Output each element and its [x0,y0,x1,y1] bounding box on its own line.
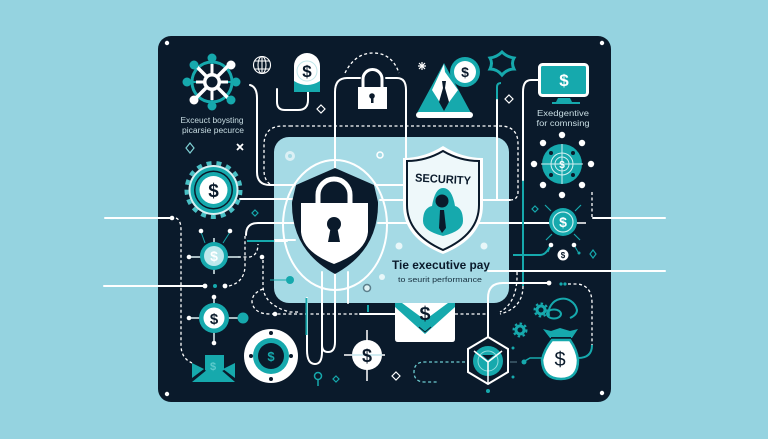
icon: coin right: $ [559,214,567,230]
circuit lines [104,53,665,382]
icon: triangle with tie [416,63,473,118]
headline text: to seurit performance [398,275,482,284]
caption: top left: Exceuct boysting [180,116,244,125]
icon: teal envelope [192,355,235,382]
caption: top right: for comnsing [536,119,590,128]
icon: money bag [510,328,578,379]
padlock [301,179,368,264]
icon: ship wheel [182,54,240,110]
icon: dollar tag [294,53,320,92]
icon: coin right [545,205,586,240]
light central panel [274,137,509,303]
icon: coin near triangle: $ [461,64,469,80]
dark circuit panel [158,36,611,402]
icon: monitor [540,64,588,104]
icon: globe [254,56,270,74]
icon: teal envelope: $ [210,361,216,373]
icon: padlock top [358,70,387,109]
icon: money bag: $ [554,349,566,371]
headline text: Tie executive pay [392,260,491,272]
icon: crosshair coin: $ [210,248,218,264]
caption: top left [180,116,245,135]
icon: coin near triangle [450,57,480,87]
security shield [403,146,483,254]
icon: monitor: $ [559,71,569,90]
icon: radial dollar hub: $ [559,160,565,171]
icon: teal hexagon [490,52,514,75]
caption: top left: picarsie pecurce [182,126,245,135]
icon: crosshair coin [187,229,240,274]
icon: gear coin [186,163,240,217]
shield figure [423,188,463,236]
icon: white envelope: $ [420,304,431,325]
icon: small key node [314,372,322,386]
icon: white envelope [395,303,455,342]
icon: hexagon badge [468,337,514,393]
headline text [392,260,491,284]
caption: top right: Exedgentive [537,109,590,118]
icon: ring coin: $ [267,349,275,364]
caption: top right [536,109,590,128]
icon: node coin [187,295,248,345]
big shield with padlock [283,160,387,290]
light panel accents [270,151,488,292]
icon: small coin with branches: $ [561,251,566,260]
small sparkles [186,62,596,382]
icon: crosshair coin bottom [344,330,385,381]
icon: node coin: $ [210,311,219,328]
icon: radial dollar hub [531,132,594,198]
icon: gear coin: $ [208,181,219,202]
icon: ring coin [244,329,298,383]
icon: teal gears [514,299,577,336]
icon: crosshair coin bottom: $ [362,346,372,366]
icon: small coin with branches [548,243,580,260]
shield label: SECURITY [415,173,472,187]
icon: dollar tag: $ [302,62,312,81]
